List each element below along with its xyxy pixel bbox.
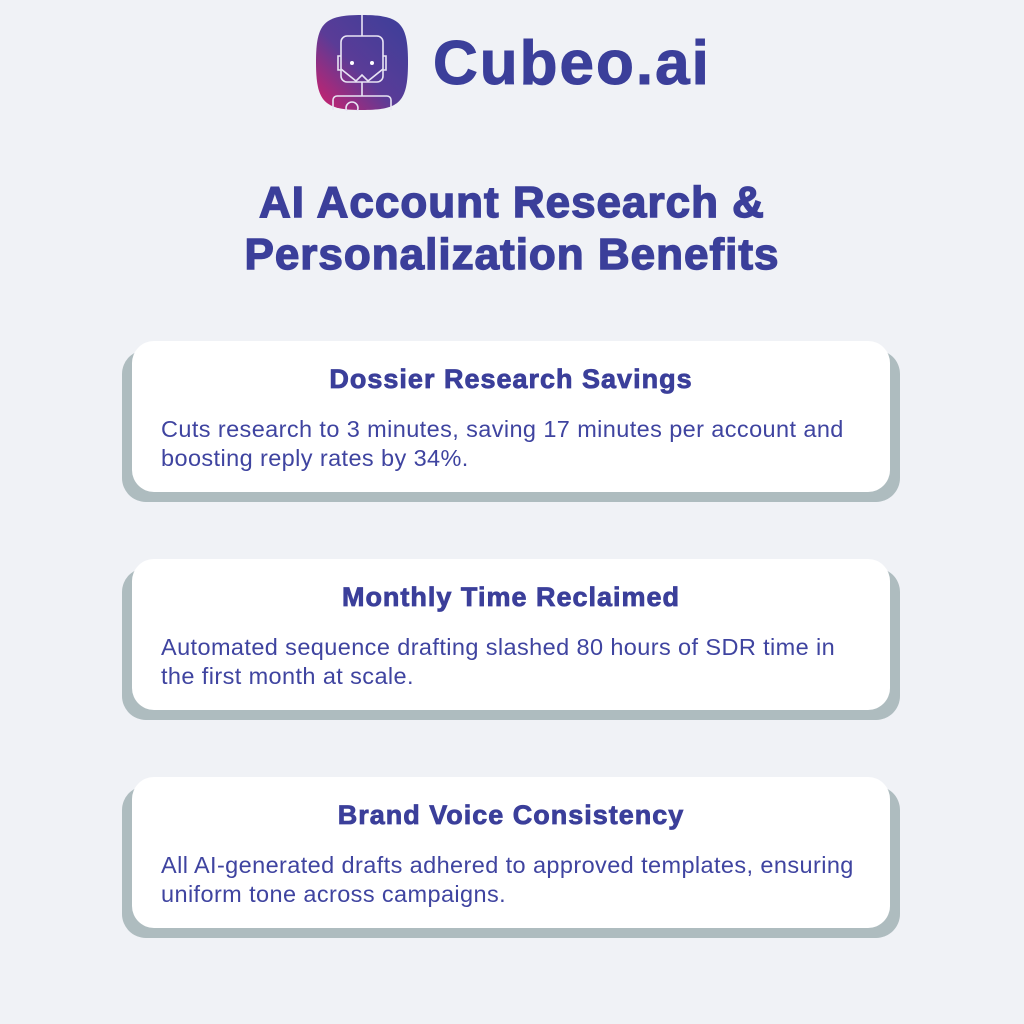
- title: AI Account Research &: [259, 178, 765, 227]
- heading: Monthly Time Reclaimed: [342, 582, 680, 612]
- panel: monthly time reclaimed: [122, 559, 900, 720]
- title: [244, 178, 780, 279]
- heading: Brand Voice Consistency: [338, 800, 684, 830]
- icon: robot: [316, 15, 408, 111]
- text block: Automated sequence drafting slashed 80 hours of SDR time in the first month at scale.: [161, 634, 835, 689]
- panel: brand voice consistency: [122, 777, 900, 938]
- logo text: Cubeo.ai: [433, 29, 711, 98]
- text block: All AI-generated drafts adhered to approved templates, ensuring uniform tone across campaigns.: [161, 852, 854, 907]
- text block: Cuts research to 3 minutes, saving 17 minutes per account and boosting reply rates by 34%.: [161, 416, 844, 471]
- heading: Dossier Research Savings: [329, 364, 693, 394]
- title: Personalization Benefits: [244, 230, 780, 279]
- panel: dossier research savings: [122, 341, 900, 502]
- logo: [316, 15, 711, 111]
